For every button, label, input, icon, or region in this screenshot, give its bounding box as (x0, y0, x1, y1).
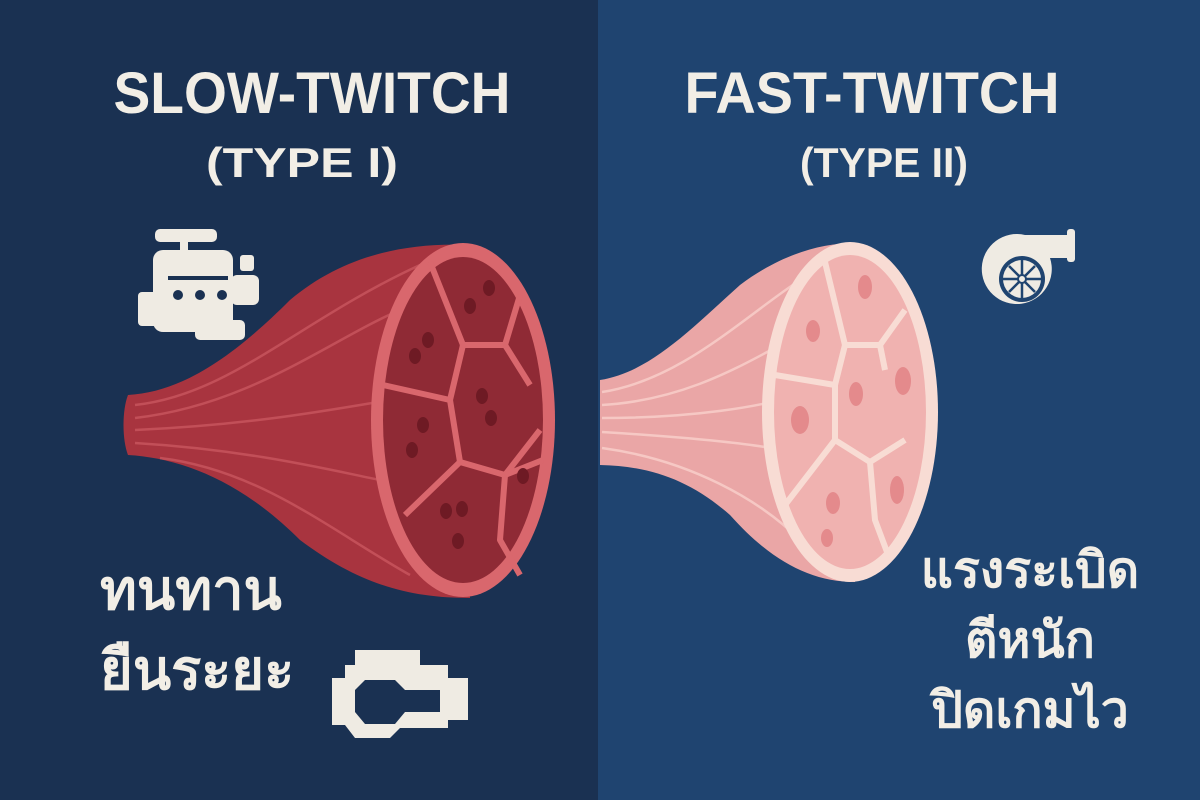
text: slow-twitch traits: ทนทาน (100, 558, 282, 621)
panel: slow-twitch background (0, 0, 598, 800)
panel: fast-twitch background (598, 0, 1200, 800)
text: fast-twitch traits: ตีหนัก (965, 612, 1095, 668)
title: fast-twitch: FAST-TWITCH (684, 61, 1060, 126)
fast-twitch muscle (600, 242, 938, 582)
text: fast-twitch traits: ปิดเกมไว (929, 681, 1129, 738)
title: slow-twitch: (TYPE I) (206, 139, 398, 186)
text: slow-twitch traits: ยืนระยะ (100, 638, 294, 701)
title: fast-twitch: (TYPE II) (800, 139, 968, 186)
icon: turbo (982, 229, 1075, 304)
title: fast-twitch (684, 61, 1060, 186)
text: fast-twitch traits: แรงระเบิด (921, 542, 1139, 598)
text: slow-twitch traits (100, 558, 294, 701)
icon: engine outline (332, 650, 468, 738)
icon: engine top-left (138, 229, 259, 340)
title: slow-twitch: SLOW-TWITCH (114, 61, 510, 126)
title: slow-twitch (114, 61, 510, 186)
text: fast-twitch traits (921, 542, 1139, 738)
slow-twitch muscle (124, 243, 555, 598)
